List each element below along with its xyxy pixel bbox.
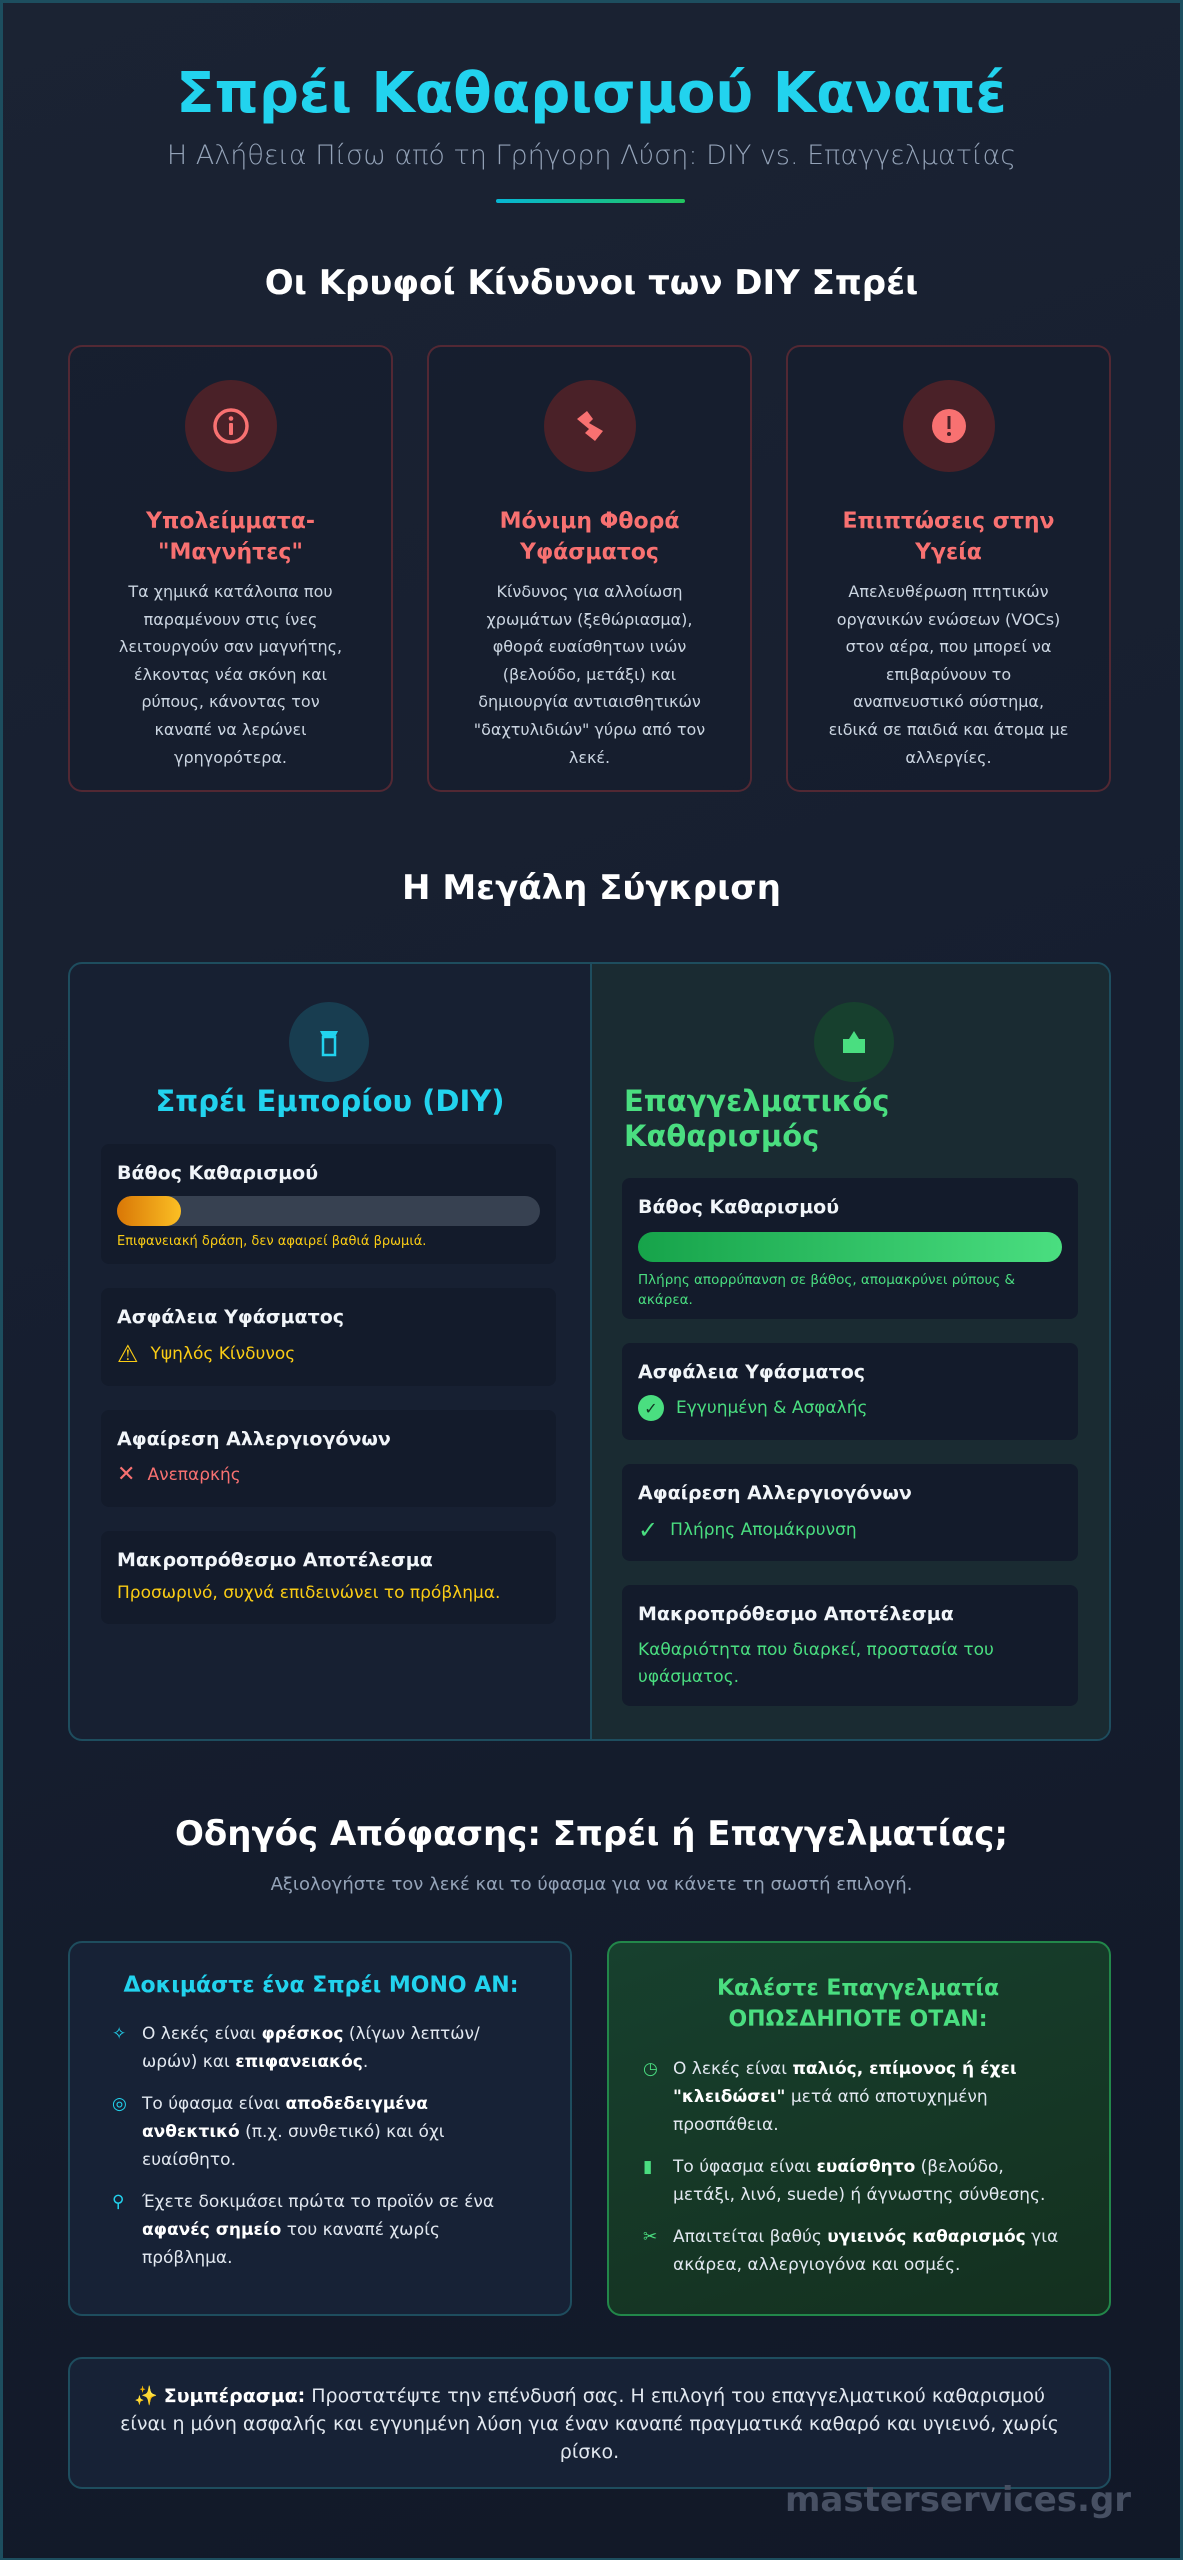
panel: health: Υγεία xyxy=(915,540,982,565)
panel: call pro: ◷ xyxy=(643,2059,658,2079)
DIY items xyxy=(101,1144,556,1264)
panel: health xyxy=(786,345,1111,792)
panel: residue xyxy=(68,345,393,792)
text: Υψηλός Κίνδυνος xyxy=(151,1344,295,1364)
subtitle: decision: Αξιολογήστε τον λεκέ και το ύφασμα για να κάνετε τη σωστή επιλογή. xyxy=(271,1874,912,1895)
text: Προσωρινό, συχνά επιδεινώνει το πρόβλημα. xyxy=(117,1583,500,1603)
text: ⚠ xyxy=(117,1340,139,1368)
panel: fabric damage xyxy=(427,345,752,792)
panel: comparison xyxy=(68,962,1111,1741)
panel: try spray: ✧ xyxy=(112,2024,126,2044)
panel: call pro: ✂ xyxy=(643,2227,657,2247)
text: Εγγυημένη & Ασφαλής xyxy=(676,1398,867,1418)
subtitle: Η Αλήθεια Πίσω από τη Γρήγορη Λύση: DIY vs. Επαγγελματίας xyxy=(167,140,1016,171)
text: Ασφάλεια Υφάσματος xyxy=(117,1306,344,1328)
panel: residue: Τα χημικά κατάλοιπα που παραμένουν στις ίνες λειτουργούν σαν μαγνήτης, έλκοντας νέα σκόνη και ρύπους, κάνοντας τον καναπέ να λερώνει γρηγορότερα. xyxy=(119,582,342,767)
text: Μακροπρόθεσμο Αποτέλεσμα xyxy=(638,1603,954,1625)
panel: call pro: ▮ xyxy=(643,2157,652,2177)
icon: pro xyxy=(814,1002,894,1082)
bar: depth DIY xyxy=(117,1196,540,1226)
panel: call pro: Απαιτείται βαθύς υγιεινός καθαρισμός για ακάρεα, αλλεργιογόνα και οσμές. xyxy=(673,2227,1058,2275)
panel: try spray: ⚲ xyxy=(112,2192,124,2212)
callout: conclusion xyxy=(68,2357,1111,2489)
callout: conclusion: είναι η μόνη ασφαλής και εγγυημένη λύση για έναν καναπέ πραγματικά καθαρό και υγιεινό, χωρίς ρίσκο. xyxy=(120,2413,1059,2463)
panel: try spray: Το ύφασμα είναι αποδεδειγμένα ανθεκτικό (π.χ. συνθετικό) και όχι ευαίσθητο. xyxy=(142,2094,445,2170)
heading: pro: Επαγγελματικός xyxy=(624,1084,889,1118)
heading: pro: Καθαρισμός xyxy=(624,1119,819,1153)
Pro items: Πλήρης απορρύπανση σε βάθος, απομακρύνει ρύπους & ακάρεα. xyxy=(638,1272,1015,1308)
panel: call pro: ΟΠΩΣΔΗΠΟΤΕ ΟΤΑΝ: xyxy=(728,2007,988,2032)
Pro items xyxy=(622,1178,1078,1319)
panel: try spray: Ο λεκές είναι φρέσκος (λίγων λεπτών/ ωρών) και επιφανειακός. xyxy=(142,2024,480,2072)
heading: DIY: Σπρέι Εμπορίου (DIY) xyxy=(155,1084,505,1118)
text: Ανεπαρκής xyxy=(147,1464,241,1484)
text: Ασφάλεια Υφάσματος xyxy=(638,1361,865,1383)
text: ✕ xyxy=(117,1462,135,1487)
panel: health: Επιπτώσεις στην xyxy=(842,509,1055,534)
panel: health: Απελευθέρωση πτητικών οργανικών ενώσεων (VOCs) στον αέρα, που μπορεί να επιβαρύνουν το αναπνευστικό σύστημα, ειδικά σε παιδιά και άτομα με αλλεργίες. xyxy=(829,582,1068,767)
callout: conclusion: ✨ Συμπέρασμα: Προστατέψτε την επένδυσή σας. Η επιλογή του επαγγελματικού καθαρισμού xyxy=(134,2385,1045,2407)
panel: call pro: μετάξι, λινό, suede) ή άγνωστης σύνθεσης. xyxy=(673,2185,1045,2205)
panel: fabric damage: Κίνδυνος για αλλοίωση χρωμάτων (ξεθώριασμα), φθορά ευαίσθητων ινών (βελούδο, μετάξι) και δημιουργία αντιαισθητικών "δαχτυλιδιών" γύρω από τον λεκέ. xyxy=(474,582,705,767)
panel: call pro: Καλέστε Επαγγελματία xyxy=(717,1976,999,2001)
icon: spray xyxy=(289,1002,369,1082)
text: ✓ xyxy=(638,1516,658,1544)
text: ✓ xyxy=(644,1398,658,1418)
bar: depth pro xyxy=(638,1232,1062,1262)
panel: fabric damage: Υφάσματος xyxy=(520,540,659,565)
panel: try spray xyxy=(68,1941,572,2316)
panel: residue: "Μαγνήτες" xyxy=(158,540,303,565)
panel: fabric damage: Μόνιμη Φθορά xyxy=(500,509,679,534)
DIY items: Επιφανειακή δράση, δεν αφαιρεί βαθιά βρωμιά. xyxy=(117,1234,426,1249)
heading: comparison: Η Μεγάλη Σύγκριση xyxy=(402,868,781,908)
panel: try spray: Έχετε δοκιμάσει πρώτα το προϊόν σε ένα αφανές σημείο του καναπέ χωρίς πρόβλημα. xyxy=(142,2192,494,2268)
text: Πλήρης Απομάκρυνση xyxy=(670,1520,857,1540)
title: Σπρέι Καθαρισμού Καναπέ xyxy=(176,61,1007,126)
heading: pro xyxy=(624,1084,889,1153)
panel: try spray: Δοκιμάστε ένα Σπρέι ΜΟΝΟ ΑΝ: xyxy=(124,1973,518,1998)
Pro items: Βάθος Καθαρισμού xyxy=(638,1196,839,1218)
panel: try spray: ◎ xyxy=(112,2094,127,2114)
watermark: masterservices.gr xyxy=(785,2480,1131,2520)
icon: info xyxy=(184,380,276,472)
panel: call pro: Το ύφασμα είναι ευαίσθητο (βελούδο, xyxy=(673,2157,1004,2177)
panel: residue: Υπολείμματα- xyxy=(146,509,315,534)
text: Αφαίρεση Αλλεργιογόνων xyxy=(638,1482,912,1504)
text: Αφαίρεση Αλλεργιογόνων xyxy=(117,1428,391,1450)
icon: broken fabric xyxy=(544,380,636,472)
icon: alert xyxy=(902,380,994,472)
text: Μακροπρόθεσμο Αποτέλεσμα xyxy=(117,1549,433,1571)
panel: call pro: Ο λεκές είναι παλιός, επίμονος ή έχει "κλειδώσει" μετά από αποτυχημένη προσπάθεια. xyxy=(673,2059,1017,2135)
heading: hidden dangers: Οι Κρυφοί Κίνδυνοι των DIY Σπρέι xyxy=(265,263,918,303)
panel: call pro xyxy=(607,1941,1111,2316)
DIY items: Βάθος Καθαρισμού xyxy=(117,1162,318,1184)
text: Καθαριότητα που διαρκεί, προστασία του υφάσματος. xyxy=(638,1640,994,1687)
heading: decision guide: Οδηγός Απόφασης: Σπρέι ή Επαγγελματίας; xyxy=(175,1814,1008,1854)
